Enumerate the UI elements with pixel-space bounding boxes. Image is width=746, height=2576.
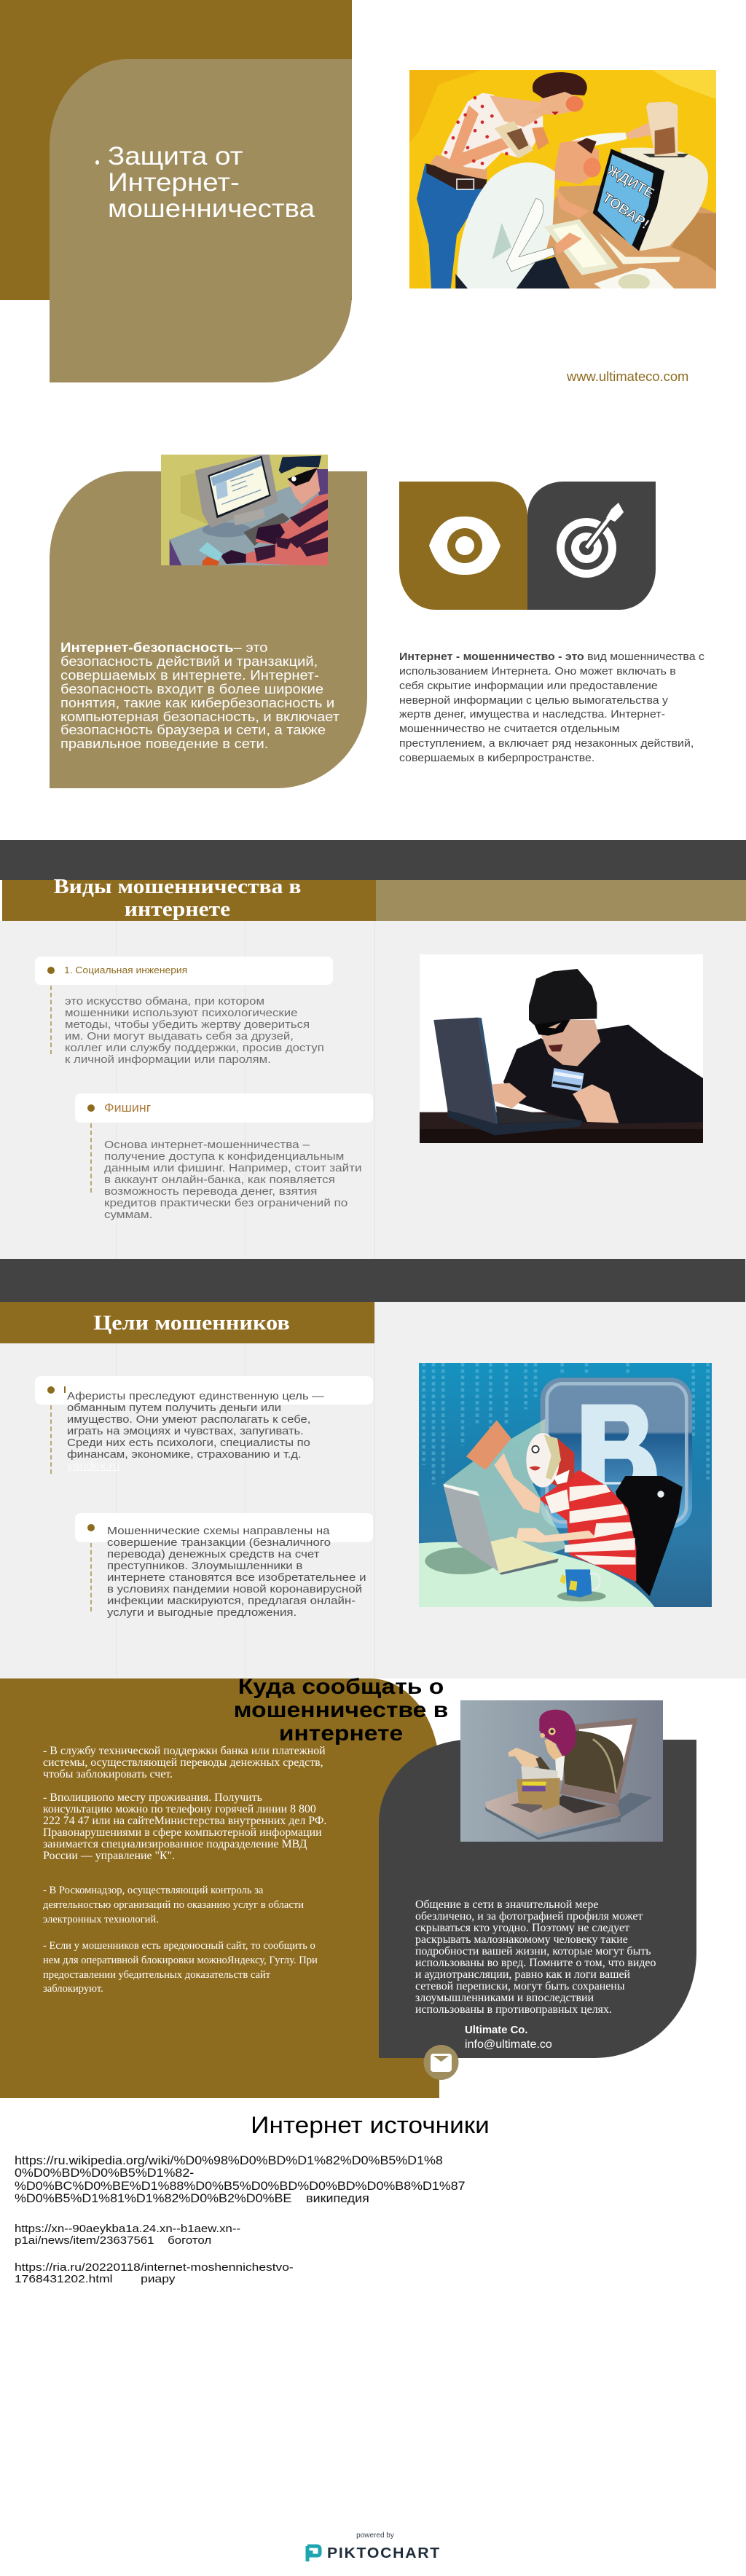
band: dark middle xyxy=(0,1259,745,1302)
panel: title brown block xyxy=(0,0,352,300)
marker: dot 1 xyxy=(47,967,55,974)
icon: eye xyxy=(399,482,527,610)
connector: dashed line 2 xyxy=(90,1123,92,1193)
card: social engineering xyxy=(35,957,333,985)
text block: online anonymity: Общение в сети в значительной мере обезличено, и за фотографией профиля может скрываться кто угодно. Поэтому не следует раскрывать малознакомому человеку такие подробности вашей жизни, которые могут быть использованы во вред. Помните о том, что видео и аудиотрансляции, равно как и логи вашей сетевой переписки, могут быть сохранены злоумышленниками и впоследствии использованы в противоправных целях. xyxy=(415,1898,656,2016)
panel: icons xyxy=(399,482,656,610)
website url: www.ultimateco.com xyxy=(567,369,688,384)
company name: Ultimate Co. xyxy=(465,2025,527,2036)
image: VK scammer cartoon xyxy=(419,1363,712,1607)
image: burglar reaching out of laptop xyxy=(460,1700,663,1842)
image: thief with laptop and card xyxy=(420,954,703,1143)
panel: title tan shape xyxy=(50,59,352,382)
text block: police: - Вполициюпо месту проживания. Получить консультацию можно по телефону горячей линии 8 800 222 74 47 или на сайтеМинистерства внутренних дел РФ. Правонарушениями в сфере компьютерной информации занимается специализированное подразделение МВД России — управление "К". xyxy=(43,1791,326,1862)
icon: target with arrow xyxy=(527,482,656,610)
sources: ria: https://ria.ru/20220118/internet-moshennichestvo- 1768431202.html риару xyxy=(15,2261,294,2285)
connector: dashed line 1 xyxy=(50,986,52,1054)
sources: wikipedia: https://ru.wikipedia.org/wiki/%D0%98%D0%BD%D1%82%D0%B5%D1%8 0%D0%BD%D0%B5%D1%82- %D0%BC%D0%BE%D1%88%D0%B5%D0%BD%D0%BD%D0%B8%D1%87 %D0%B5%D1%81%D1%82%D0%B2%D0%BE википедия xyxy=(15,2154,466,2205)
label: social engineering: 1. Социальная инженерия xyxy=(64,965,187,975)
marker: dot 3 xyxy=(47,1386,55,1394)
image: cartoon couple at computer: ТОВАР! xyxy=(600,190,652,232)
band: brown goals heading xyxy=(0,1302,374,1343)
heading: internet sources: Интернет источники xyxy=(251,2112,490,2138)
band: tan heading right xyxy=(376,880,746,921)
text block: malicious site: - Если у мошенников есть вредоносный сайт, то сообщить о нем для оперативной блокировки можноЯндексу, Гуглу. При предоставлении убедительных доказательств сайт заблокируют. xyxy=(43,1940,318,1995)
marker: tick xyxy=(64,1386,66,1393)
connector: dashed line 3 xyxy=(50,1405,52,1474)
card: goal one xyxy=(35,1376,373,1405)
sources: bogotol: https://xn--90aeykba1a.24.xn--b1aew.xn-- p1ai/news/item/23637561 боготол xyxy=(15,2223,240,2247)
heading: fraudster goals: Цели мошенников xyxy=(93,1312,290,1335)
heading: where to report: Куда сообщать о мошенничестве в интернете xyxy=(234,1675,448,1746)
text block: bank support: - В службу технической поддержки банка или платежной системы, осуществляющей переводы денежных средств, чтобы заблокировать счет. xyxy=(43,1745,326,1780)
panel: report dark shape xyxy=(379,1740,696,2058)
connector: dashed line 4 xyxy=(90,1543,92,1611)
icon: mail xyxy=(424,2045,459,2080)
panel: gray background xyxy=(0,921,746,1678)
text block: internet safety: Интернет-безопасность– это безопасность действий и транзакций, совершаемых в интернете. Интернет- безопасность входит в более широкие понятия, такие как кибербезопасность и компьютерная безопасность, и включает безопасность браузера и сети, а также правильное поведение в сети. xyxy=(60,640,339,751)
heading: fraud types: Виды мошенничества в интернете xyxy=(54,875,301,921)
panel: internet safety tan shape xyxy=(50,471,367,788)
title bullet xyxy=(95,160,99,165)
credit: powered by: powered by xyxy=(356,2532,394,2540)
title: Защита от Интернет- мошенничества xyxy=(108,142,315,223)
band: brown heading xyxy=(2,880,376,921)
text block: social engineering: это искусство обмана, при котором мошенники используют психологические методы, чтобы убедить жертву довериться им. Они могут выдавать себя за друзей, коллег или службу поддержки, просив доступ к личной информации или паролям. xyxy=(65,995,324,1066)
text block: internet fraud: Интернет - мошенничество - это вид мошенничества с использованием Интернета. Оно может включать в себя скрытие информации или предоставление неверной информации с целью вымогательства у жертв денег, имущества и наследства. Интернет- мошенничество не считается отдельным преступлением, а включает ряд незаконных действий, совершаемых в киберпространстве. xyxy=(399,651,704,764)
image: cartoon couple at computer xyxy=(409,70,716,288)
label: phishing: Фишинг xyxy=(104,1101,151,1115)
text block: goal one: Аферисты преследуют единственную цель — обманным путем получить деньги или имущество. Они умеют располагать к себе, играть на эмоциях и чувствах, запугивать. Среди них есть психологи, специалисты по финансам, экономике, страхованию и т.д. xyxy=(67,1390,324,1461)
text block: roskomnadzor: - В Роскомнадзор, осуществляющий контроль за деятельностью организаций по оказанию услуг в области электронных технологий. xyxy=(43,1885,304,1925)
card: goal two xyxy=(75,1513,373,1542)
marker: dot 2 xyxy=(87,1104,95,1112)
panel: report brown shape xyxy=(0,1678,439,2098)
band: dark top xyxy=(0,840,746,880)
text block: goal two: Мошеннические схемы направлены на совершение транзакции (безналичного перевода) денежных средств на счет преступников. Злоумышленники в интернете становятся все изобретательнее и в условиях пандемии новой коронавирусной инфекции маскируются, предлагая онлайн- услуги и выгодные предложения. xyxy=(107,1525,366,1619)
card: phishing xyxy=(75,1093,373,1123)
marker: dot 4 xyxy=(87,1524,95,1531)
faint link: yandex.ru xyxy=(67,1460,119,1472)
image: masked hacker at monitor xyxy=(161,455,328,565)
text block: phishing: Основа интернет-мошенничества – получение доступа к конфиденциальным данным или фишинг. Например, стоит зайти в аккаунт онлайн-банка, как появляется возможность перевода денег, взятия кредитов практически без ограничений по суммам. xyxy=(104,1139,362,1221)
image: cartoon couple at computer: ЖДИТЕ xyxy=(604,162,656,202)
logo: piktochart: PIKTOCHART xyxy=(327,2545,441,2561)
company email: info@ultimate.co xyxy=(465,2038,552,2051)
